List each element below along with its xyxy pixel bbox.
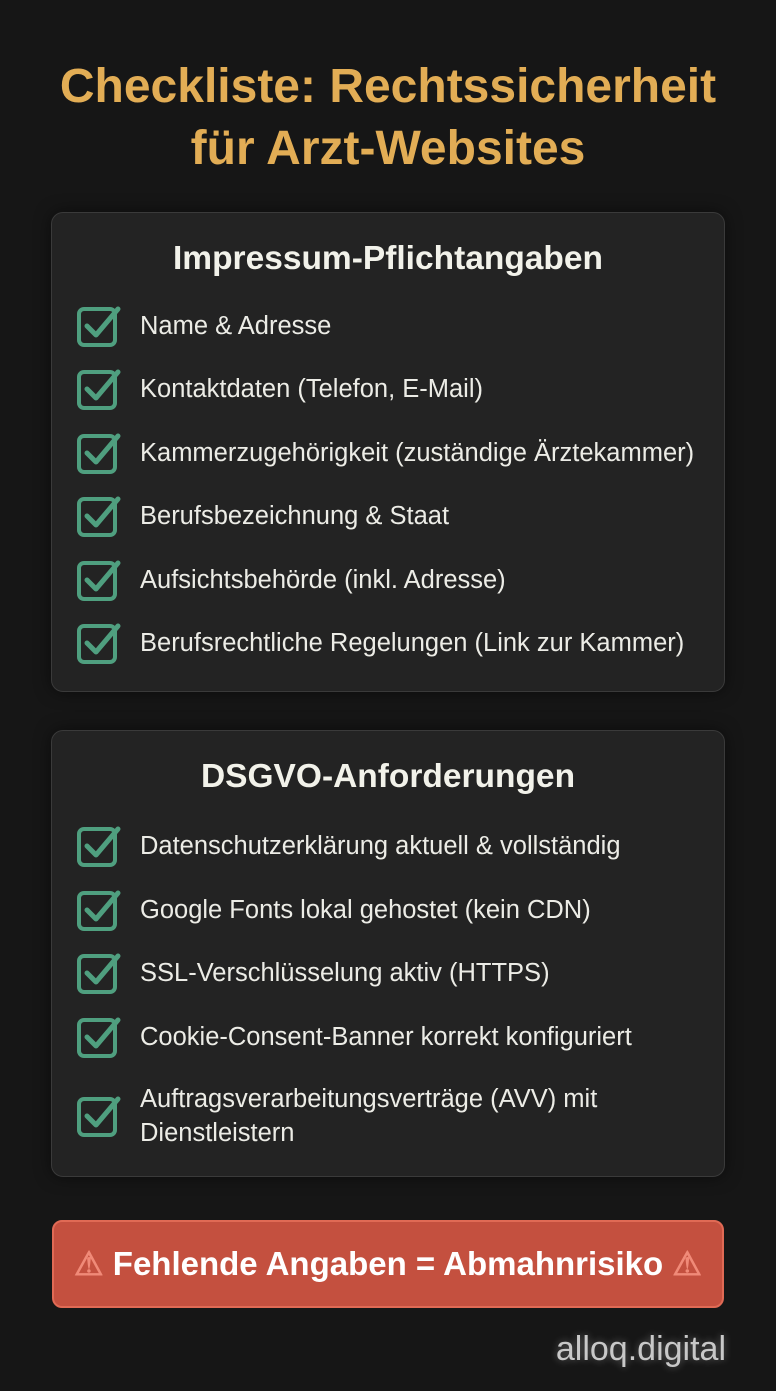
item 6: Berufsrechtliche Regelungen (Link zur Kammer)	[140, 629, 684, 657]
item 2: Kontaktdaten (Telefon, E-Mail)	[140, 375, 483, 403]
banner: warning: ⚠ Fehlende Angaben = Abmahnrisiko ⚠	[74, 1245, 702, 1282]
item 5: Aufsichtsbehörde (inkl. Adresse)	[140, 566, 506, 594]
item 5: Dienstleistern	[140, 1119, 294, 1147]
item 2	[77, 370, 483, 410]
banner: warning	[52, 1220, 724, 1308]
item 3: SSL-Verschlüsselung aktiv (HTTPS)	[140, 959, 550, 987]
item 5	[77, 1085, 598, 1147]
item 3	[77, 954, 550, 994]
panel: DSGVO	[51, 730, 725, 1177]
item 5: Auftragsverarbeitungsverträge (AVV) mit	[140, 1085, 597, 1113]
item 6	[77, 624, 684, 664]
title	[60, 60, 716, 175]
item 1: Name & Adresse	[140, 312, 331, 340]
item 4	[77, 496, 449, 537]
title: Checkliste: Rechtssicherheit	[60, 60, 716, 113]
heading: DSGVO: DSGVO-Anforderungen	[201, 758, 575, 795]
item 4: Cookie-Consent-Banner korrekt konfiguriert	[140, 1023, 632, 1051]
brand: alloq.digital	[556, 1330, 726, 1368]
item 3: Kammerzugehörigkeit (zuständige Ärztekammer)	[140, 439, 694, 467]
item 2: Google Fonts lokal gehostet (kein CDN)	[140, 896, 591, 924]
item 5	[77, 560, 506, 601]
item 4: Berufsbezeichnung & Staat	[140, 502, 449, 530]
item 1	[77, 826, 621, 867]
panel: Impressum	[51, 212, 725, 692]
item 3	[77, 434, 694, 474]
item 1	[77, 306, 331, 347]
item 4	[77, 1018, 632, 1058]
item 1: Datenschutzerklärung aktuell & vollständig	[140, 832, 621, 860]
item 2	[77, 890, 591, 931]
title: für Arzt-Websites	[191, 122, 585, 175]
heading: Impressum: Impressum-Pflichtangaben	[173, 240, 603, 277]
